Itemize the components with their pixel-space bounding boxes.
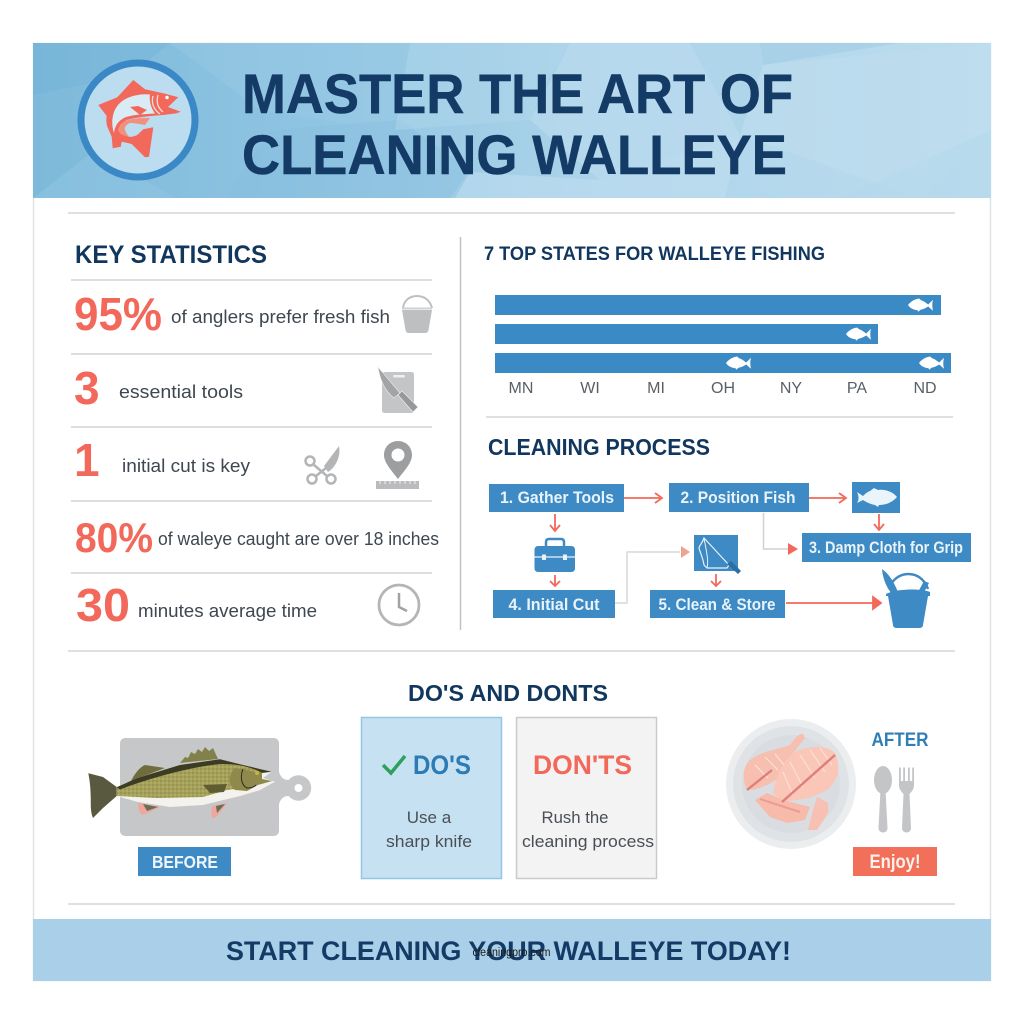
stat: 95% — [74, 288, 390, 340]
do's text — [386, 808, 472, 851]
icon: knife on cutting board — [378, 367, 418, 413]
step 3 — [802, 533, 971, 562]
before label — [138, 847, 231, 876]
icon: toolbox — [534, 539, 575, 572]
walleye fish — [88, 747, 275, 819]
stat: 95%: of anglers prefer fresh fish — [171, 307, 390, 327]
state labels: ND — [913, 380, 937, 397]
panel: after — [726, 719, 937, 876]
state labels: OH — [711, 380, 735, 397]
step 1: 1. Gather Tools — [500, 489, 614, 507]
step 5 — [650, 590, 785, 618]
pectoral fin — [203, 784, 227, 793]
step 3: 3. Damp Cloth for Grip — [809, 539, 963, 557]
stat: 80% — [75, 514, 439, 561]
panel: top states chart — [484, 243, 951, 397]
tail fin — [88, 773, 117, 818]
stat: 95%: 95% — [74, 288, 162, 340]
stat: 1 initial cut: 1 — [74, 434, 100, 486]
do's text: Use a — [407, 808, 452, 827]
stat: 1 initial cut — [74, 434, 250, 486]
stat: 30 minutes — [76, 579, 317, 631]
footer banner: START CLEANING YOUR WALLEYE TODAY! — [226, 936, 791, 966]
header banner — [33, 43, 991, 198]
don'ts text: Rush the — [542, 808, 608, 827]
bar chart — [495, 295, 951, 373]
step 2: 2. Position Fish — [680, 489, 796, 507]
fish markers — [726, 299, 944, 370]
pelvic fins — [138, 803, 160, 815]
state labels: MI — [647, 380, 665, 397]
state labels: PA — [847, 380, 867, 397]
stat: 80%: of waleye caught are over 18 inches — [158, 529, 439, 549]
arrows — [550, 493, 884, 609]
stat: 3 tools: essential tools — [119, 382, 243, 402]
before label: BEFORE — [152, 852, 218, 872]
icon: bucket — [402, 296, 432, 333]
title — [242, 62, 793, 186]
step 4 — [493, 590, 615, 618]
panel: before — [88, 738, 311, 876]
footer banner — [33, 919, 991, 981]
stat: 3 tools — [74, 362, 243, 414]
panel: key statistics — [71, 241, 439, 631]
icon: location pin on ruler — [376, 441, 419, 489]
logo: fish in circle — [81, 63, 195, 177]
icon: spoon and fork — [874, 766, 914, 832]
title: CLEANING WALLEYE — [242, 123, 787, 186]
panel: cleaning process — [488, 434, 971, 628]
icon: check mark — [383, 756, 405, 773]
state labels: NY — [780, 380, 802, 397]
stat: 30 minutes: minutes average time — [138, 601, 317, 621]
icon: knife tile — [694, 535, 741, 574]
don'ts text: cleaning process — [522, 832, 654, 851]
panel: don'ts — [516, 718, 656, 878]
icon: scissors — [306, 446, 339, 484]
step 2 — [669, 483, 809, 512]
heading: top states: 7 TOP STATES FOR WALLEYE FISHING — [484, 243, 825, 265]
icon: clock — [379, 585, 419, 625]
heading: cleaning process: CLEANING PROCESS — [488, 434, 710, 460]
heading: key statistics: KEY STATISTICS — [75, 241, 267, 269]
section dividers — [68, 213, 955, 904]
enjoy label — [853, 847, 937, 876]
stat: 1 initial cut: initial cut is key — [122, 456, 250, 476]
do's title: DO'S — [413, 750, 471, 780]
stat: 80%: 80% — [75, 514, 153, 561]
heading: do's and don'ts: DO'S AND DONTS — [408, 680, 608, 706]
stat: 3 tools: 3 — [74, 362, 100, 414]
after label: AFTER — [872, 730, 929, 751]
step 4: 4. Initial Cut — [508, 596, 600, 614]
stat: 30 minutes: 30 — [76, 579, 130, 631]
plate with fillets — [726, 719, 856, 849]
state labels: MN — [509, 380, 533, 397]
do's text: sharp knife — [386, 832, 472, 851]
icon: bucket with tools — [882, 569, 930, 628]
state labels: WI — [580, 380, 600, 397]
enjoy label: Enjoy! — [870, 852, 920, 873]
soft dorsal fin — [131, 765, 165, 781]
don'ts title: DON'TS — [533, 750, 632, 780]
title: MASTER THE ART OF — [242, 62, 793, 125]
website text: cleaningpro.com — [472, 947, 550, 959]
step 5: 5. Clean & Store — [658, 596, 776, 614]
icon: fish tile — [852, 482, 900, 513]
state labels — [509, 380, 937, 397]
body — [117, 759, 275, 807]
panel: do's — [362, 718, 502, 878]
spiny dorsal fin — [180, 747, 218, 763]
don'ts text — [522, 808, 654, 851]
step 1 — [489, 484, 624, 512]
head — [230, 768, 272, 791]
cutting board — [120, 738, 311, 836]
